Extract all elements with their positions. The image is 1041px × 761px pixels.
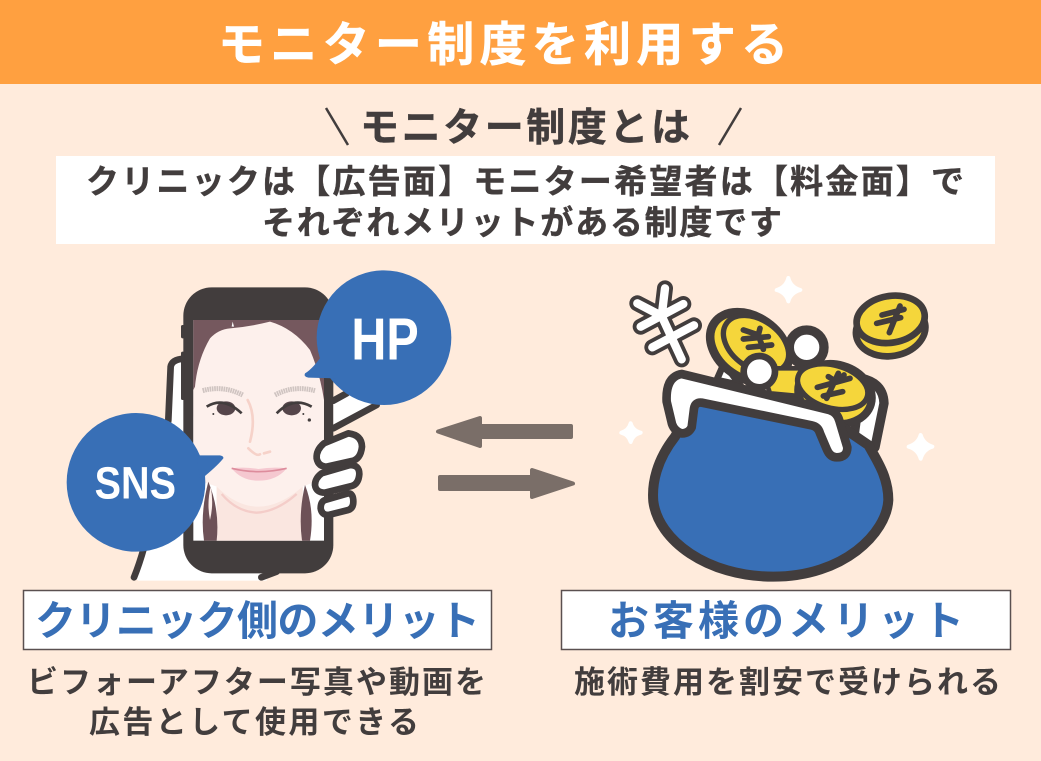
illustration: phone with face	[67, 270, 451, 581]
yen symbol	[637, 288, 694, 359]
purse frame	[667, 374, 847, 457]
title banner	[0, 0, 1041, 84]
lips	[232, 468, 287, 481]
nose	[248, 400, 270, 455]
panel: customer merit: お客様のメリット	[608, 598, 964, 644]
panel: customer merit	[562, 590, 1010, 650]
sparkles	[621, 278, 932, 459]
eyes	[207, 401, 312, 422]
panel: clinic merit: クリニック側のメリット	[35, 598, 480, 644]
eyebrows	[203, 389, 315, 395]
speech bubble: HP	[305, 270, 451, 405]
fingers and thumb	[315, 392, 378, 515]
speech bubble: SNS	[67, 413, 223, 552]
side hair strands	[203, 482, 217, 541]
definition text box: それぞれメリットがある制度です	[262, 204, 782, 241]
definition text box	[56, 156, 995, 244]
speech bubble: SNS: SNS	[95, 457, 176, 508]
phone screen with portrait	[193, 320, 324, 541]
hand behind phone	[135, 359, 267, 581]
text: customer merit description: 施術費用を割安で受けられる	[574, 665, 1001, 700]
illustration: coin purse	[621, 278, 932, 577]
jaw line	[222, 494, 297, 513]
speech bubble: HP: HP	[351, 305, 419, 372]
loose coin	[852, 290, 930, 362]
purse back frame	[853, 378, 884, 447]
purse clasp ball front	[744, 356, 775, 387]
subtitle heading: モニター制度とは	[360, 107, 690, 150]
phone body	[183, 287, 333, 573]
definition text box: クリニックは【広告面】モニター希望者は【料金面】で	[86, 163, 964, 200]
arrow: left	[438, 418, 571, 446]
arrow: right	[440, 470, 573, 497]
purse clasp ball back	[789, 330, 824, 365]
purse body	[653, 398, 888, 577]
coins in purse	[697, 298, 879, 432]
text: clinic merit description: ビフォーアフター写真や動画を	[27, 665, 486, 700]
text: clinic merit description: 広告として使用できる	[89, 705, 419, 740]
text: clinic merit description	[27, 665, 486, 740]
title banner: モニター制度を利用する	[218, 18, 788, 71]
